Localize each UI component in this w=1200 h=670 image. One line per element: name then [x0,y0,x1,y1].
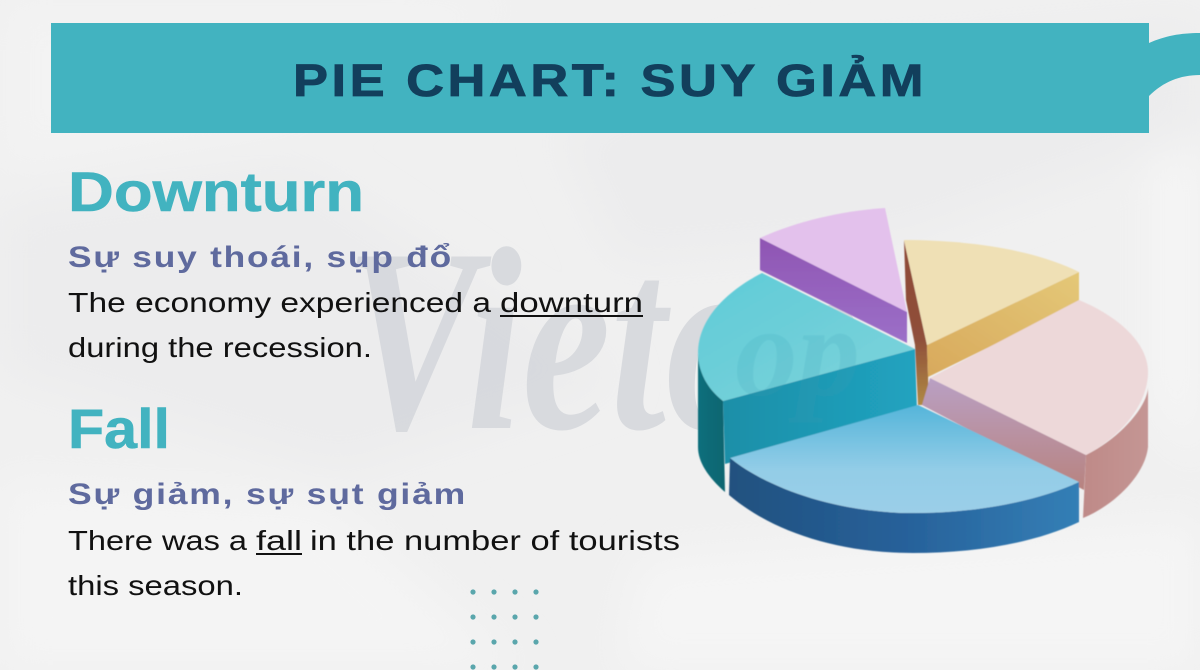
title banner [51,23,1149,133]
example sentence: Fall: There was a [68,525,247,556]
slice: pink [922,300,1148,518]
slice: blue [729,405,1079,553]
slice: purple [760,208,907,343]
meaning: Fall: Sự giảm, sự sụt giảm [68,478,467,511]
example sentence: Fall: fall [256,525,302,556]
example sentence: Fall: in the number of tourists [310,525,680,556]
slice: teal [698,273,917,492]
example sentence: Fall: this season. [68,570,243,601]
example sentence: Downturn [68,287,643,363]
meaning: Downturn: Sự suy thoái, sụp đổ [68,241,453,274]
text block: Fall [68,397,680,601]
example sentence: Downturn: during the recession. [68,332,372,363]
example sentence: Downturn: The economy experienced a [68,287,492,318]
title: PIE CHART: SUY GIẢM [293,55,927,106]
watermark: Vietop: Vietop [345,195,865,485]
heading: Downturn: Downturn [68,160,364,223]
watermark over teal: op [735,280,860,424]
decorative curve at header right [1149,33,1200,96]
example sentence: Downturn: downturn [500,287,643,318]
slice: yellow [904,240,1079,405]
3D pie chart [698,208,1148,553]
heading: Fall: Fall [68,397,170,460]
dot grid [470,589,539,670]
text block: Downturn [68,160,643,363]
example sentence: Fall [68,525,680,601]
